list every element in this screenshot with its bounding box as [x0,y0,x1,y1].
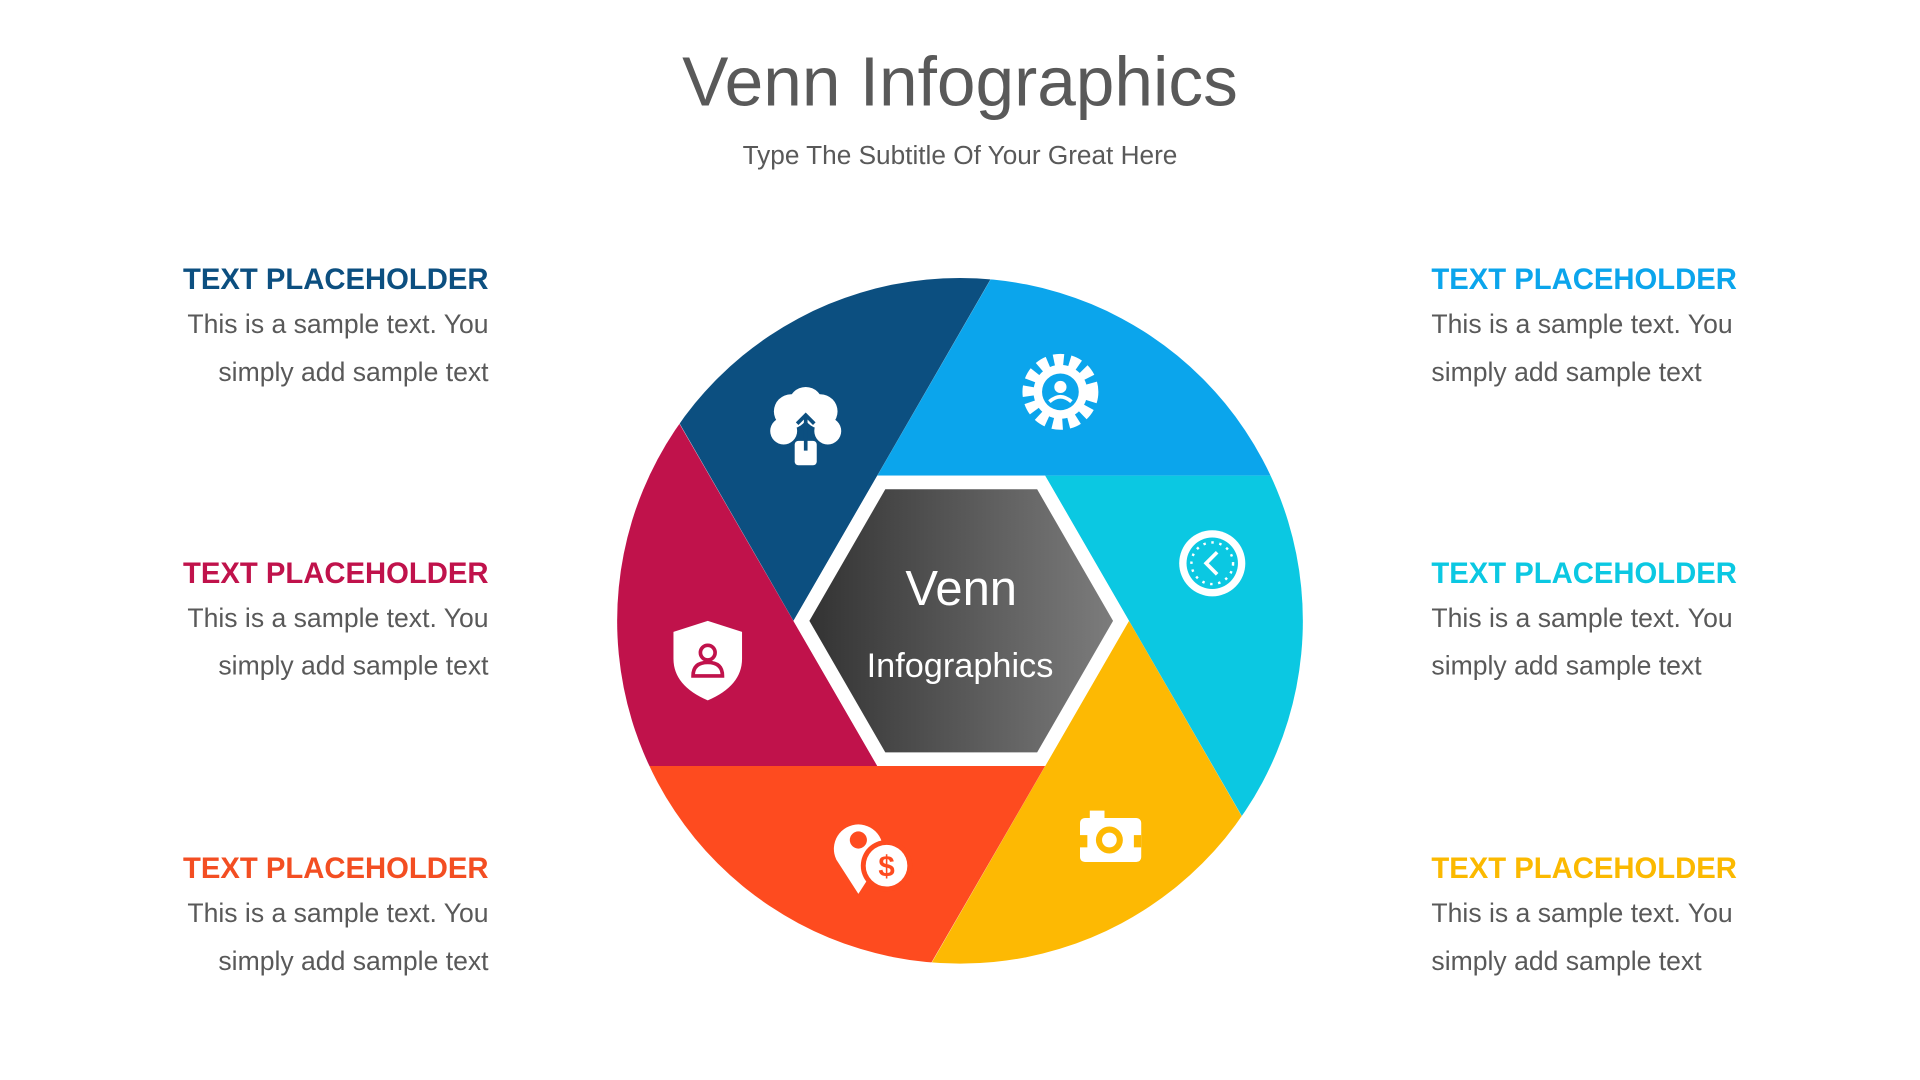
text block: left 1: simply add sample text [218,357,489,387]
pie chart [617,278,1303,964]
hexagon center: Infographics [867,647,1053,685]
icon: shield person [673,621,742,700]
text block: left 2: This is a sample text. You [187,603,489,633]
text block: right 3: This is a sample text. You [1431,898,1733,928]
text block: left 2: simply add sample text [218,651,489,681]
icon: camera [1080,811,1141,862]
text block: left 3: This is a sample text. You [187,898,489,928]
text block: right 3: TEXT PLACEHOLDER [1431,853,1737,885]
text block: right 2: This is a sample text. You [1431,603,1733,633]
text block: right 2: TEXT PLACEHOLDER [1431,558,1737,590]
subtitle: Type The Subtitle Of Your Great Here [743,140,1177,170]
text block: left 3 [183,853,489,976]
icon: gear person [1029,360,1092,424]
text block: right 1 [1431,264,1737,387]
segment: blue [878,279,1271,476]
text block: right 2 [1431,558,1737,681]
icon: clock [1179,530,1245,596]
hexagon center: Venn [905,562,1017,616]
icon: brain bulb [770,387,841,465]
segment: crimson [617,424,878,766]
text block: right 2: simply add sample text [1431,651,1702,681]
text block: left 2: TEXT PLACEHOLDER [183,558,489,590]
hexagon center [793,476,1129,766]
text block: right 1: TEXT PLACEHOLDER [1431,264,1737,296]
text block: left 2 [183,558,489,681]
text block: left 1: TEXT PLACEHOLDER [183,264,489,296]
text block: left 3: simply add sample text [218,946,489,976]
text block: right 3: simply add sample text [1431,946,1702,976]
text block: left 1 [183,264,489,387]
title: Venn Infographics [682,42,1238,120]
segment: dark blue [680,278,990,621]
text block: right 3 [1431,853,1737,976]
text block: right 1: simply add sample text [1431,357,1702,387]
icon: location dollar [834,824,912,894]
segment: cyan [1045,476,1303,816]
segment: orange [650,766,1045,962]
text block: left 1: This is a sample text. You [187,309,489,339]
text block: right 1: This is a sample text. You [1431,309,1733,339]
text block: left 3: TEXT PLACEHOLDER [183,853,489,885]
icon: location dollar: $ [878,851,895,884]
segment: yellow [932,621,1242,964]
